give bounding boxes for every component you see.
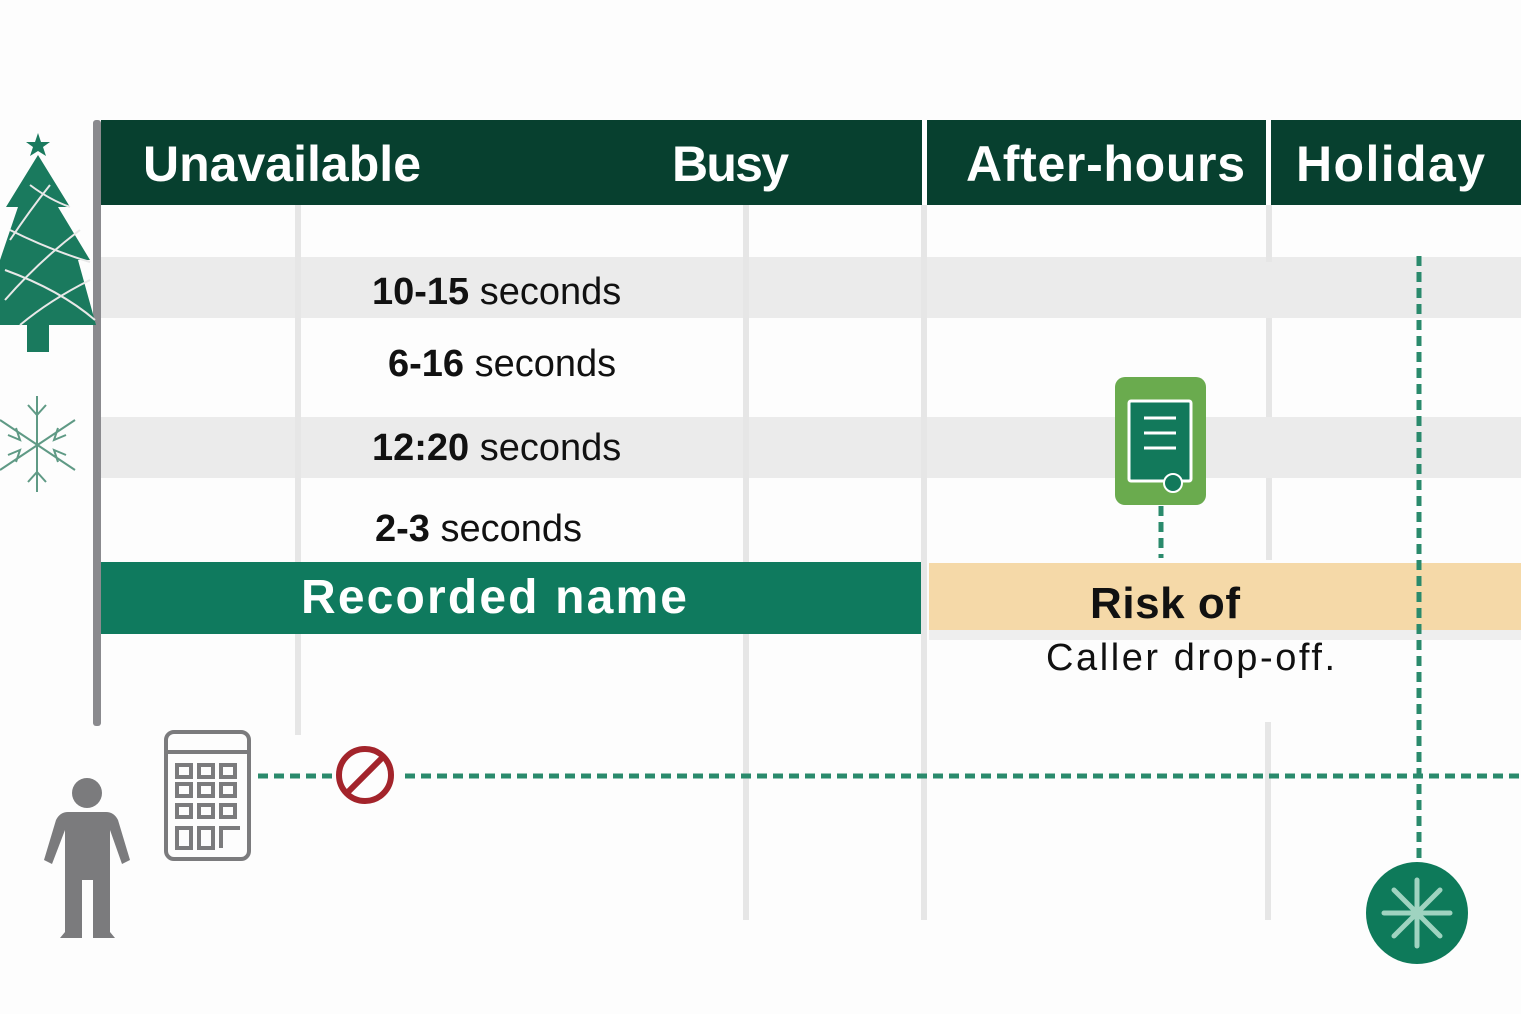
grid lines xyxy=(298,205,1269,920)
header band: Busy xyxy=(672,136,789,192)
durations: 10-15 seconds xyxy=(372,271,621,313)
durations xyxy=(372,271,621,550)
icon: snowflake xyxy=(0,396,75,492)
durations: 6-16 seconds xyxy=(388,343,616,385)
icon: person xyxy=(44,778,130,938)
risk bar: Caller drop-off. xyxy=(1046,637,1335,679)
icon: holiday circle xyxy=(1366,862,1468,964)
recorded name bar: Recorded name xyxy=(301,571,687,624)
icon: document xyxy=(1115,377,1206,505)
durations: 12:20 seconds xyxy=(372,427,621,469)
dashed connectors xyxy=(258,256,1521,862)
risk bar xyxy=(929,563,1521,679)
grey rows xyxy=(101,257,1521,318)
recorded name bar xyxy=(101,562,921,634)
durations: 2-3 seconds xyxy=(375,508,582,550)
icon: tree xyxy=(0,133,96,352)
header band: Unavailable xyxy=(143,136,421,192)
icon: prohibited xyxy=(339,749,391,801)
header band: Holiday xyxy=(1296,136,1485,192)
header band xyxy=(101,120,1521,205)
header band: After-hours xyxy=(966,136,1245,192)
left axis bar xyxy=(93,120,101,726)
icon: calculator xyxy=(166,732,249,859)
risk bar: Risk of xyxy=(1090,579,1240,628)
